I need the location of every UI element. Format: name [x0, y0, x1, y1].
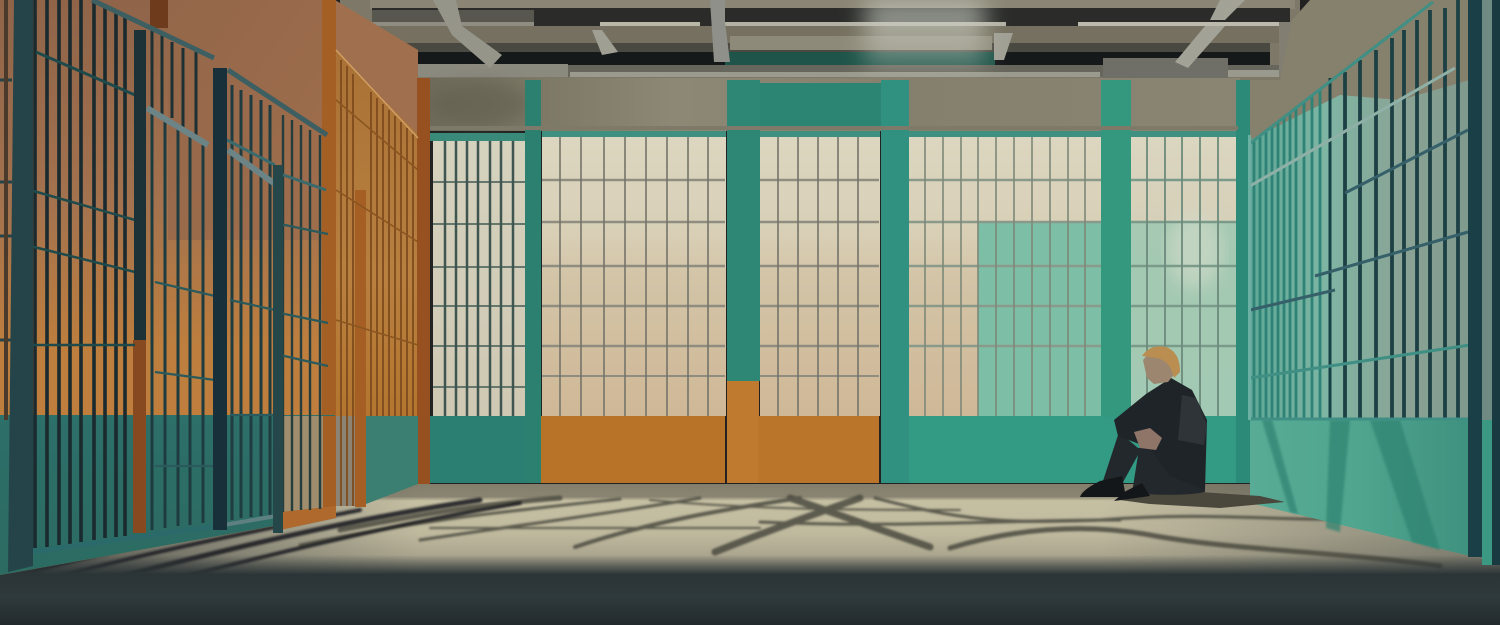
left gate bars	[30, 0, 328, 552]
floor	[0, 484, 1500, 625]
horizontal conduit	[430, 126, 1238, 130]
left gate posts	[0, 0, 283, 572]
teal columns	[430, 80, 1250, 483]
window panes	[433, 137, 1236, 416]
seated person	[1080, 346, 1285, 508]
person shadow	[1120, 492, 1285, 508]
ceiling	[340, 0, 1300, 80]
right gate bars	[1248, 0, 1470, 420]
back wall concrete	[430, 78, 1240, 131]
lower wall panels	[430, 381, 1240, 483]
hands	[1134, 428, 1162, 450]
window bars	[433, 137, 1236, 416]
foreground shadow	[0, 555, 1500, 625]
right wall	[1250, 0, 1470, 556]
rear wall grille	[336, 50, 418, 506]
hair	[1142, 346, 1180, 378]
left orange wall	[0, 0, 430, 575]
shoes	[1080, 476, 1126, 497]
head	[1143, 352, 1176, 384]
legs	[1102, 432, 1205, 495]
floor shadows of the bars	[2, 498, 1440, 600]
right gate posts	[1468, 0, 1500, 565]
torso	[1114, 378, 1207, 490]
